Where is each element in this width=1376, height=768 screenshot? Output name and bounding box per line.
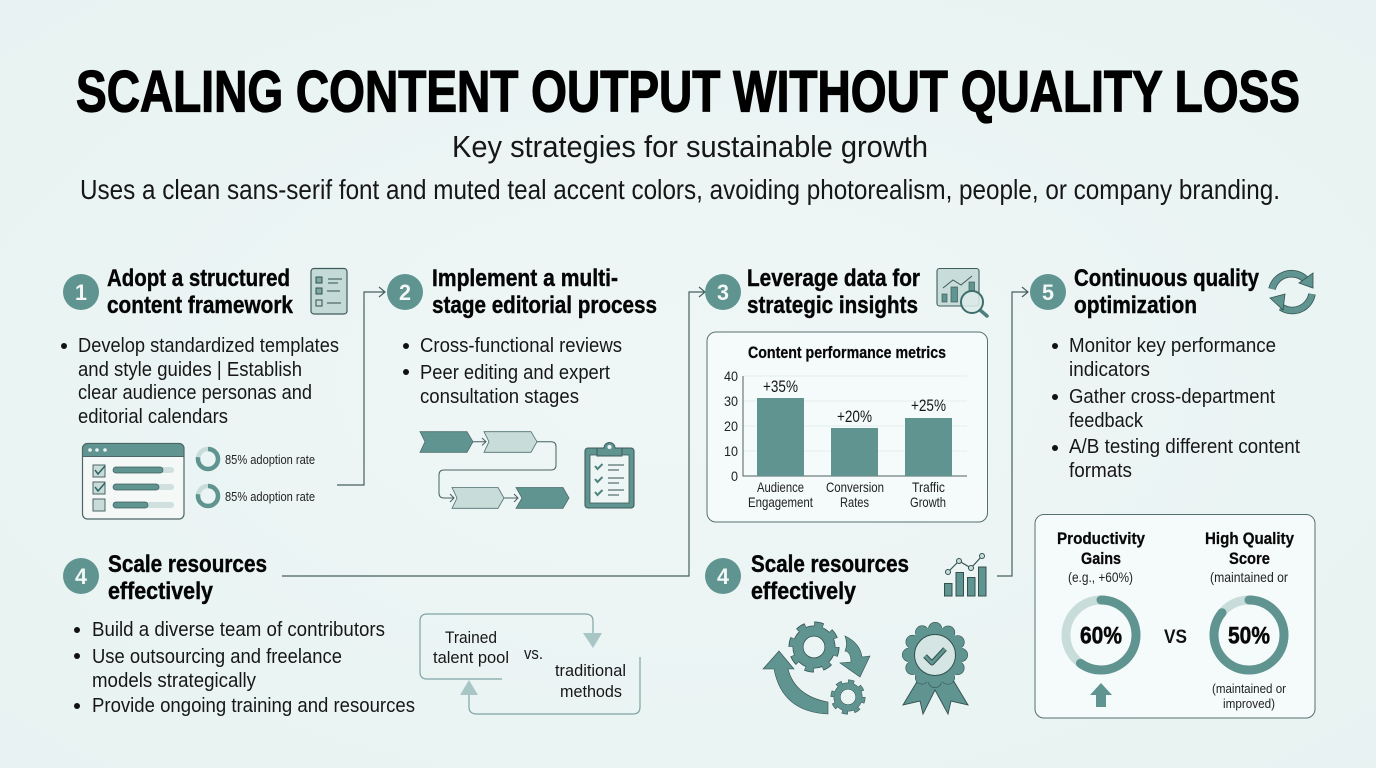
heading step 5 xyxy=(1074,265,1260,319)
subtitle: Key strategies for sustainable growth xyxy=(452,130,928,164)
bullet list step 5: Gather cross-department xyxy=(1069,386,1275,408)
panel: step 3 data insights xyxy=(705,265,988,522)
high quality score column: improved) xyxy=(1223,696,1275,711)
bullet list step 2: Cross-functional reviews xyxy=(420,335,622,357)
number badge 4: 4 xyxy=(75,564,88,589)
bullet list step 5: A/B testing different content xyxy=(1069,436,1300,458)
heading step 2 xyxy=(432,265,657,319)
icon: checklist xyxy=(311,268,347,314)
productivity gains column: (e.g., +60%) xyxy=(1068,569,1133,585)
high quality score column: (maintained or xyxy=(1212,681,1287,696)
bar: conversion rates +20%: Conversion xyxy=(826,479,884,495)
panel: step 4 scale resources right xyxy=(705,551,986,714)
diagram: talent pool vs traditional methods: methods xyxy=(560,682,622,701)
number badge 2 xyxy=(387,274,423,310)
bullet list step 2: Peer editing and expert xyxy=(420,362,610,384)
bar: audience engagement +35%: +35% xyxy=(763,377,798,396)
adoption donut 2 xyxy=(198,486,315,506)
heading step 3: strategic insights xyxy=(747,292,918,319)
diagram: talent pool vs traditional methods xyxy=(420,614,640,714)
bullet list step 5: Monitor key performance xyxy=(1069,335,1276,357)
bar: audience engagement +35%: Audience xyxy=(757,479,804,495)
vs label: VS xyxy=(1164,627,1187,648)
bar chart panel: content performance metrics: 30 xyxy=(724,393,738,409)
heading step 1: content framework xyxy=(107,292,294,319)
bar chart panel: content performance metrics: Content performance metrics xyxy=(748,343,946,362)
heading step 3 xyxy=(747,265,920,319)
icon: quality award badge xyxy=(903,627,968,714)
arrow: step 4 right to step 5 xyxy=(997,287,1028,576)
bar: traffic growth +25% xyxy=(905,396,952,510)
panel: step 1 structured content framework xyxy=(61,265,347,519)
bullet list step 4 xyxy=(74,619,415,717)
panel: step 5 continuous optimization xyxy=(1030,265,1315,718)
icon: gears with cycle arrows xyxy=(763,624,870,714)
number badge 4 xyxy=(63,558,99,594)
high quality score column: High Quality xyxy=(1205,529,1294,548)
adoption donut 2: 85% adoption rate xyxy=(225,489,315,504)
bar: audience engagement +35%: Engagement xyxy=(748,494,813,510)
bar chart panel: content performance metrics: 10 xyxy=(724,443,738,459)
icon: growth bars with trend line xyxy=(944,554,986,596)
bullet list step 5 xyxy=(1052,335,1300,482)
panel: step 4 scale resources left xyxy=(63,551,640,717)
illustration: process flow chevrons xyxy=(420,432,569,508)
heading step 4 right: effectively xyxy=(751,578,857,605)
heading step 4 xyxy=(108,551,267,605)
diagram: talent pool vs traditional methods: Trained xyxy=(445,628,497,647)
diagram: talent pool vs traditional methods: talent pool xyxy=(433,648,509,667)
arrow: step 4 left to step 3 xyxy=(282,287,705,576)
heading step 5: Continuous quality xyxy=(1074,265,1260,292)
bullet list step 4: Use outsourcing and freelance xyxy=(92,646,342,668)
productivity gains column: 60% xyxy=(1080,622,1122,650)
diagram: talent pool vs traditional methods: traditional xyxy=(555,661,626,680)
number badge 3 xyxy=(705,274,741,310)
heading step 3: Leverage data for xyxy=(747,265,920,292)
high quality score column: 50% xyxy=(1228,622,1270,650)
bullet list step 5: indicators xyxy=(1069,359,1150,381)
bar chart panel: content performance metrics: 0 xyxy=(731,468,738,484)
bar: traffic growth +25%: Traffic xyxy=(912,479,945,495)
adoption donut 1: 85% adoption rate xyxy=(225,452,315,467)
bar chart panel: content performance metrics: 40 xyxy=(724,368,738,384)
bullet list step 5: formats xyxy=(1069,460,1132,482)
bar: traffic growth +25%: Growth xyxy=(910,494,946,510)
productivity gains column: Productivity xyxy=(1057,529,1145,548)
bullet list step 1: Develop standardized templates xyxy=(78,335,339,357)
diagram: talent pool vs traditional methods: vs. xyxy=(524,644,543,663)
bar chart panel: content performance metrics: 20 xyxy=(724,418,738,434)
high quality score column xyxy=(1205,529,1294,711)
bar chart panel: content performance metrics xyxy=(707,332,988,522)
high quality score column: (maintained or xyxy=(1210,569,1288,585)
number badge 4 right: 4 xyxy=(717,564,730,589)
bar: traffic growth +25%: +25% xyxy=(911,396,946,415)
heading step 2: Implement a multi- xyxy=(432,265,618,292)
arrow: step 1 to step 2 xyxy=(337,287,385,485)
adoption donut 1 xyxy=(198,449,315,469)
heading step 4: Scale resources xyxy=(108,551,267,578)
bullet list step 2 xyxy=(403,335,622,408)
heading step 1 xyxy=(107,265,294,319)
number badge 5: 5 xyxy=(1042,280,1054,305)
number badge 4 right xyxy=(705,558,741,594)
icon: analytics magnifier xyxy=(937,268,987,316)
bar: conversion rates +20% xyxy=(826,407,884,510)
bar: conversion rates +20%: +20% xyxy=(837,407,872,426)
bar: conversion rates +20%: Rates xyxy=(840,494,869,510)
number badge 1: 1 xyxy=(75,280,87,305)
bullet list step 4: Provide ongoing training and resources xyxy=(92,695,415,717)
heading step 4: effectively xyxy=(108,578,214,605)
productivity gains column: Gains xyxy=(1081,549,1121,568)
number badge 1 xyxy=(63,274,99,310)
bullet list step 1 xyxy=(61,335,339,428)
bullet list step 1: clear audience personas and xyxy=(78,382,312,404)
heading step 2: stage editorial process xyxy=(432,292,657,319)
bullet list step 1: and style guides | Establish xyxy=(78,359,302,381)
bullet list step 4: models strategically xyxy=(92,670,256,692)
bullet list step 1: editorial calendars xyxy=(78,406,228,428)
comparison panel: productivity vs quality xyxy=(1035,514,1315,718)
high quality score column: Score xyxy=(1229,549,1270,568)
bullet list step 2: consultation stages xyxy=(420,386,579,408)
number badge 2: 2 xyxy=(399,280,411,305)
number badge 5 xyxy=(1030,274,1066,310)
number badge 3: 3 xyxy=(717,280,729,305)
bullet list step 5: feedback xyxy=(1069,410,1144,432)
heading step 5: optimization xyxy=(1074,292,1197,319)
panel: step 2 editorial process xyxy=(387,265,657,508)
bullet list step 4: Build a diverse team of contributors xyxy=(92,619,385,641)
bar: audience engagement +35% xyxy=(748,377,813,510)
icon: refresh cycle xyxy=(1270,273,1313,311)
heading step 4 right xyxy=(751,551,909,605)
illustration: template window xyxy=(82,444,184,519)
heading step 1: Adopt a structured xyxy=(107,265,290,292)
icon: clipboard xyxy=(585,442,634,508)
heading step 4 right: Scale resources xyxy=(751,551,909,578)
productivity gains column xyxy=(1057,529,1145,707)
